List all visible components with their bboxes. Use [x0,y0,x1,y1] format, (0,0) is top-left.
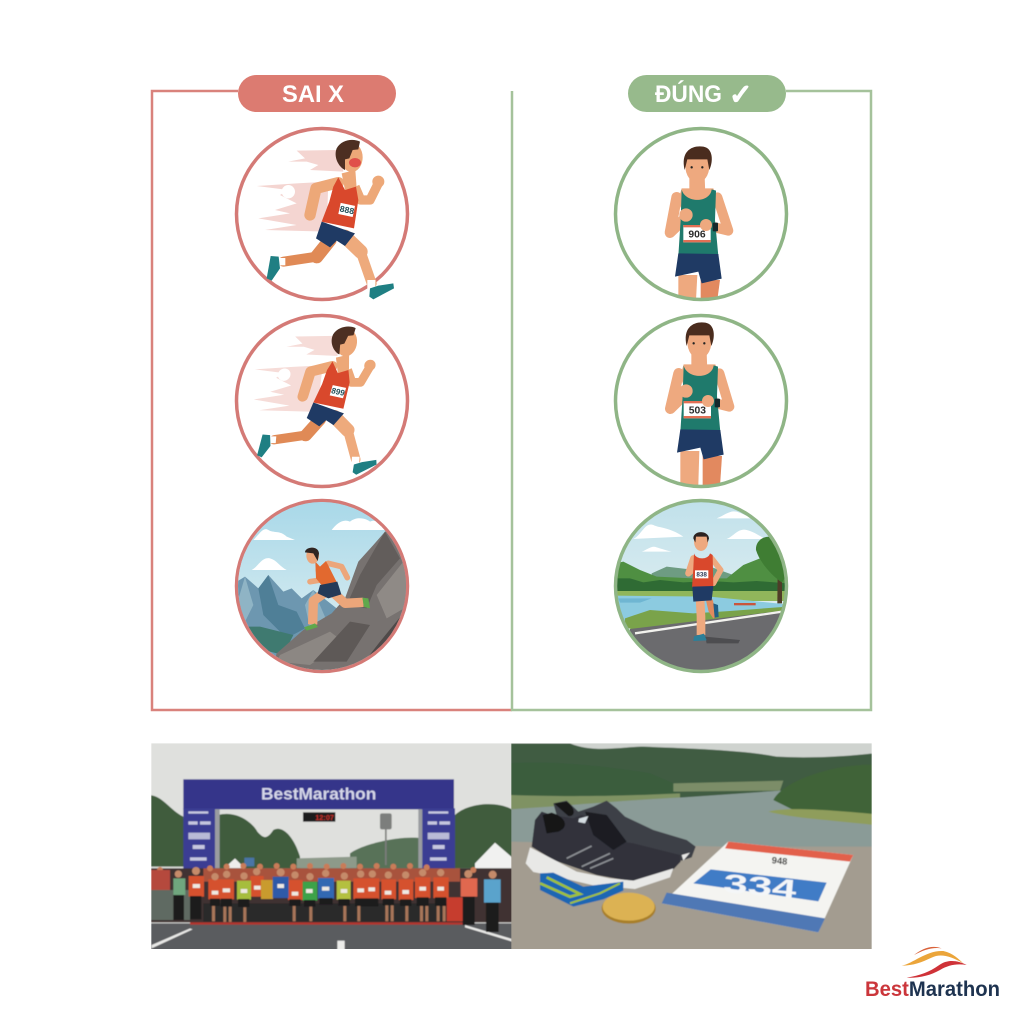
shorts and legs [173,895,499,932]
heading: SAI X pill: SAI X [282,81,344,108]
race bib [662,842,853,932]
illustration: runner on flat lakeside road: 838 [696,572,707,579]
frame: right column border [512,91,871,710]
medal [601,902,656,924]
icon: second upright relaxed runner, bib 503 [670,322,729,496]
ring: circle outlines for right column [616,128,786,672]
icon: second runner sprinting with speed lines: 899 [330,386,346,398]
road [151,922,512,949]
trees behind the arch [150,795,513,868]
stone ledge [510,842,873,953]
panel: SAI (wrong) column [152,75,512,710]
race bib: 334 [722,868,799,904]
ring: circle outlines for wrong column [236,128,408,672]
icon: upright relaxed runner, bib 906: 906 [688,229,706,240]
heading: ĐÚNG check pill [628,75,786,112]
icon: upright relaxed runner, bib 906 [670,146,728,300]
heading: SAI X pill [238,75,396,112]
photo: running shoes, medal and race bib by a lake [510,740,873,953]
heading: ĐÚNG check pill: ✓ [729,78,752,111]
medal ribbon [540,873,623,907]
race timer: 12:07 [315,813,334,822]
icon: logo wave swooshes [902,947,967,978]
icon: second runner sprinting with speed lines [246,327,388,475]
illustration: runner on flat lakeside road [617,502,785,670]
jerseys [189,876,449,900]
illustration: runner climbing steep rocky mountain [238,502,406,670]
forested hills [511,743,872,798]
heading: ĐÚNG check pill: ĐÚNG [655,80,722,108]
heads [175,867,497,880]
panel: ĐÚNG (right) column [512,75,871,710]
logo: BestMarathon [865,947,1000,1001]
lake [510,791,873,850]
start arch: BestMarathon [261,784,376,803]
race timer [303,812,335,822]
bibs [193,884,444,896]
light pole [380,813,392,865]
shoes [526,801,696,889]
start arch [182,778,456,870]
race bib: 948 [771,855,788,867]
wordmark: BestMarathon [865,978,1000,1001]
island [773,765,873,815]
icon: runner sprinting too fast, flushed face [257,140,394,299]
photo: marathon start line with BestMarathon arch and runners [150,740,513,953]
crowd of runners [150,863,513,932]
frame: wrong column border [152,91,512,710]
icon: runner sprinting too fast, flushed face: 888 [339,204,355,216]
icon: second upright relaxed runner, bib 503: 503 [689,405,706,416]
